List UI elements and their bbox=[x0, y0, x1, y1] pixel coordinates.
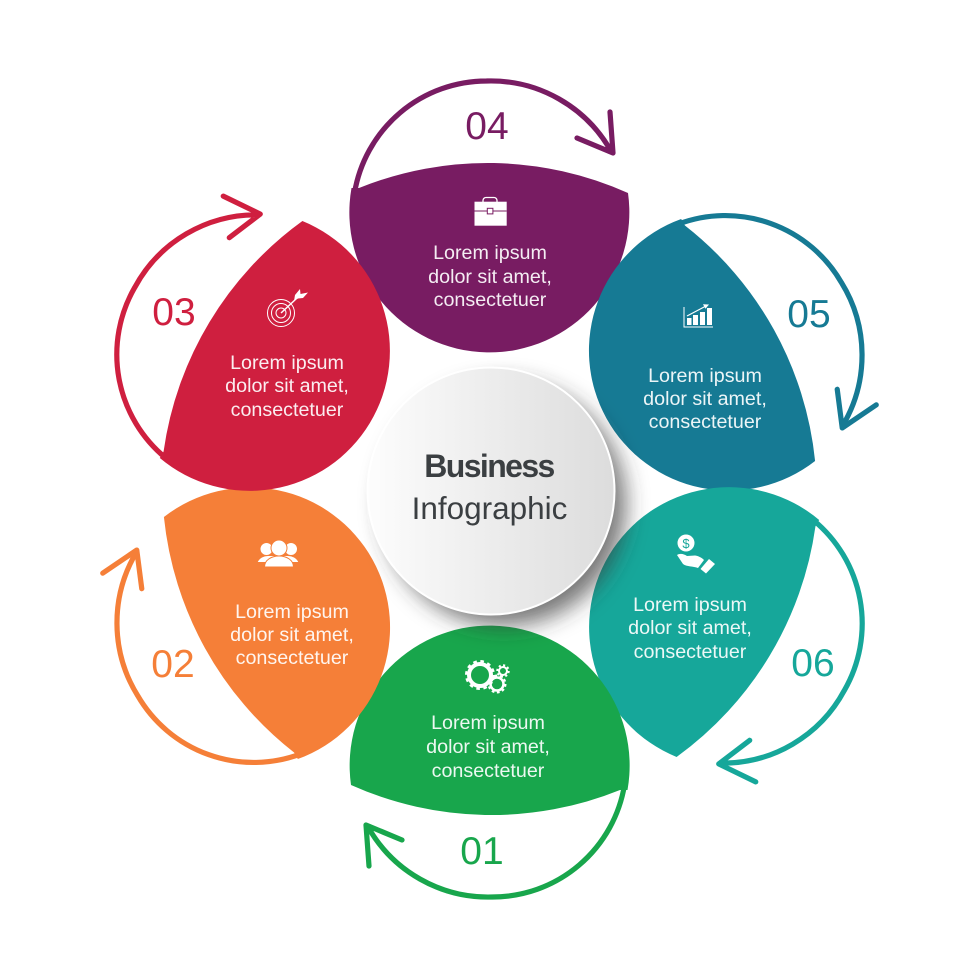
icon: gears bbox=[467, 662, 508, 692]
number 03: 03 bbox=[152, 291, 196, 334]
petal and arrow 04 bbox=[349, 81, 629, 352]
icon: briefcase bbox=[474, 198, 507, 226]
text 05: dolor sit amet, bbox=[643, 388, 767, 410]
text 04: Lorem ipsum bbox=[433, 242, 547, 264]
text 04: dolor sit amet, bbox=[428, 266, 552, 288]
text 04: consectetuer bbox=[434, 289, 547, 311]
petal and arrow 06 bbox=[538, 436, 913, 814]
panel 06 content bbox=[628, 534, 835, 685]
text 03: Lorem ipsum bbox=[230, 352, 344, 374]
text 01: consectetuer bbox=[432, 760, 545, 782]
title: Business: Business bbox=[424, 448, 555, 484]
title: Infographic: Infographic bbox=[412, 490, 567, 526]
text 03: consectetuer bbox=[231, 399, 344, 421]
text 02: consectetuer bbox=[236, 647, 349, 669]
petal and arrow 05 bbox=[538, 164, 913, 542]
text 01: Lorem ipsum bbox=[431, 712, 545, 734]
number 04: 04 bbox=[465, 105, 509, 148]
center disc shadow bbox=[382, 382, 626, 626]
icon: growth chart bbox=[684, 304, 713, 327]
center disc bbox=[368, 368, 614, 614]
petal and arrow 01 bbox=[350, 626, 630, 897]
panel 06: teal bbox=[538, 436, 913, 814]
petal and arrow 02 bbox=[66, 436, 441, 814]
text 01: dolor sit amet, bbox=[426, 736, 550, 758]
panel 04: purple bbox=[349, 81, 629, 352]
text 05: Lorem ipsum bbox=[648, 365, 762, 387]
text 06: dolor sit amet, bbox=[628, 617, 752, 639]
panel 03: red bbox=[66, 164, 441, 542]
icon: hand with coin: $ bbox=[682, 536, 690, 551]
icon: hand with coin bbox=[677, 534, 715, 574]
text 05: consectetuer bbox=[649, 411, 762, 433]
icon: people bbox=[257, 540, 299, 567]
icon: target bbox=[268, 289, 308, 326]
number 02: 02 bbox=[151, 643, 195, 686]
text 06: consectetuer bbox=[634, 641, 747, 663]
text 02: dolor sit amet, bbox=[230, 624, 354, 646]
panel 02: orange bbox=[66, 436, 441, 814]
number 06: 06 bbox=[791, 642, 835, 685]
text 06: Lorem ipsum bbox=[633, 594, 747, 616]
petal and arrow 03 bbox=[66, 164, 441, 542]
text 03: dolor sit amet, bbox=[225, 375, 349, 397]
panel 01: green bbox=[350, 626, 630, 897]
panel 05: blue bbox=[538, 164, 913, 542]
text 02: Lorem ipsum bbox=[235, 601, 349, 623]
number 01: 01 bbox=[460, 830, 504, 873]
number 05: 05 bbox=[787, 293, 831, 336]
panel 01 content bbox=[426, 662, 550, 873]
